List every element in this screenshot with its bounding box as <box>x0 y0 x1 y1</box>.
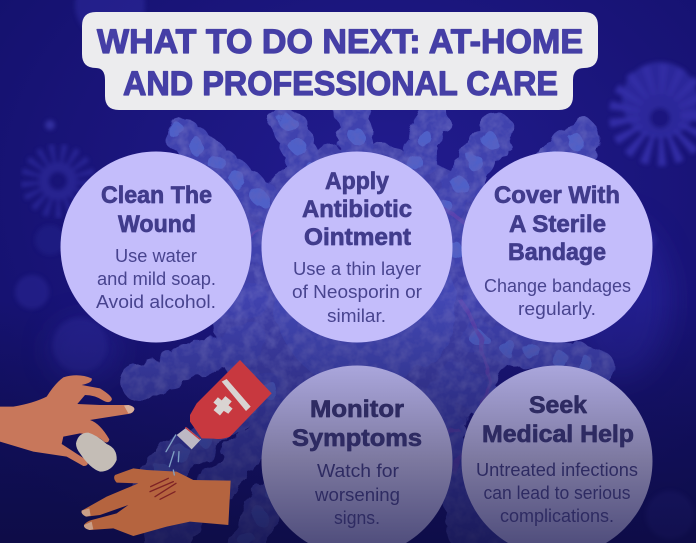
icon: upper hand <box>0 375 134 466</box>
panel: cover with a sterile bandage: A Sterile <box>509 211 606 238</box>
title text: WHAT TO DO NEXT: AT-HOME <box>97 23 583 61</box>
icon: antiseptic bottle <box>166 360 272 475</box>
illustration: hands and antiseptic bottle <box>0 360 272 536</box>
bottom dark overlay <box>0 300 696 543</box>
panel: cover with a sterile bandage: Cover With <box>494 182 620 209</box>
virus illustration <box>135 110 610 543</box>
panel: monitor symptoms: Watch for <box>317 460 399 481</box>
panel: cover with a sterile bandage: Bandage <box>508 239 606 266</box>
title banner <box>82 12 598 110</box>
panel: clean the wound: Use water <box>115 245 197 266</box>
panel: apply antibiotic ointment: Apply <box>325 168 390 195</box>
panel: clean the wound: Avoid alcohol. <box>96 291 216 312</box>
panel: apply antibiotic ointment: Antibiotic <box>302 196 412 223</box>
title text: AND PROFESSIONAL CARE <box>123 65 558 103</box>
panel: cover with a sterile bandage: Change bandages <box>484 275 631 296</box>
panel: apply antibiotic ointment: similar. <box>327 305 386 326</box>
icon: small virus top right <box>622 62 696 151</box>
icon: gauze <box>76 433 117 472</box>
panel: clean the wound: Wound <box>118 211 196 238</box>
background glow <box>50 220 670 380</box>
panel: seek medical help: complications. <box>500 505 614 526</box>
panel: clean the wound <box>60 152 252 342</box>
icon: injured hand <box>82 468 231 536</box>
panel: monitor symptoms <box>262 366 452 543</box>
panel: seek medical help: Untreated infections <box>476 459 638 480</box>
panel: apply antibiotic ointment <box>262 152 452 342</box>
panel: seek medical help: Seek <box>529 392 588 419</box>
panel: seek medical help: Medical Help <box>482 421 634 448</box>
panel: apply antibiotic ointment: Ointment <box>304 224 411 251</box>
panel: clean the wound: and mild soap. <box>97 268 216 289</box>
panel: monitor symptoms: signs. <box>334 507 380 528</box>
panel: monitor symptoms: Symptoms <box>292 425 422 452</box>
icon: small virus left <box>31 154 85 208</box>
panel: cover with a sterile bandage: regularly. <box>518 298 596 319</box>
panel: apply antibiotic ointment: of Neosporin or <box>292 281 422 302</box>
panel: cover with a sterile bandage <box>462 152 652 342</box>
panel: seek medical help: can lead to serious <box>484 482 630 503</box>
panel: seek medical help <box>462 366 652 543</box>
panel: apply antibiotic ointment: Use a thin layer <box>293 258 421 279</box>
panel: clean the wound: Clean The <box>101 182 212 209</box>
panel: monitor symptoms: worsening <box>314 484 400 505</box>
panel: monitor symptoms: Monitor <box>310 396 404 423</box>
